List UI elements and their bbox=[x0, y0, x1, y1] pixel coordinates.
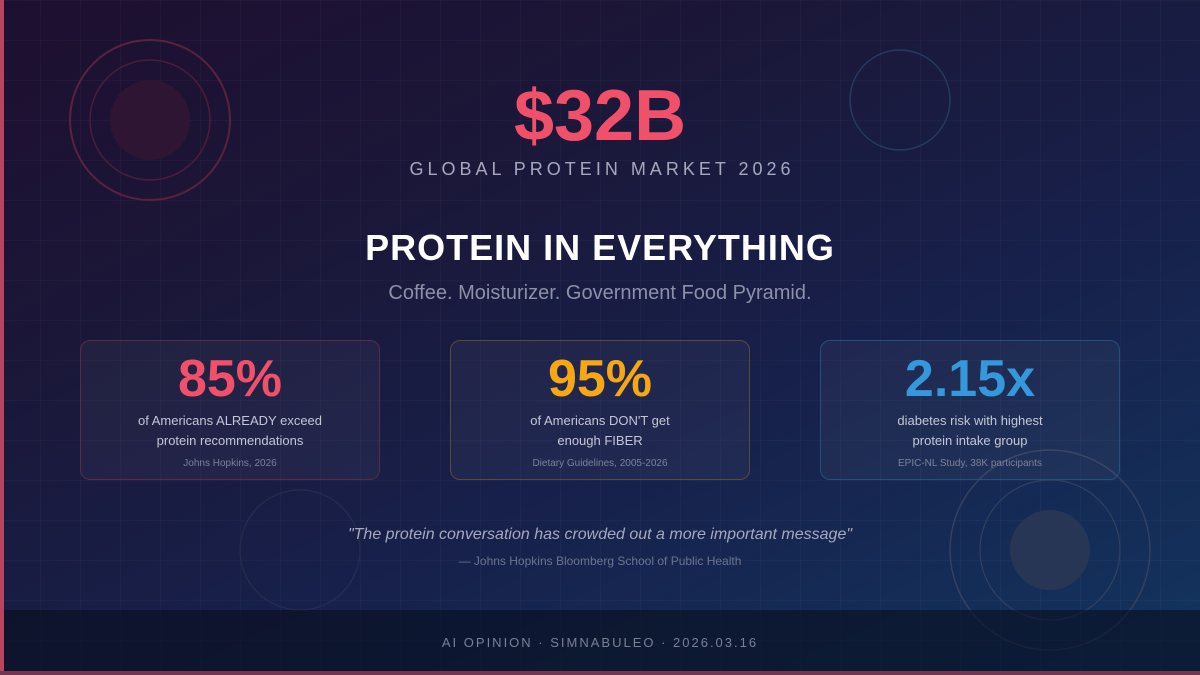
card: 95% bbox=[450, 340, 750, 480]
card: 85%: protein recommendations bbox=[157, 433, 303, 448]
card: 85%: 85% bbox=[178, 350, 282, 408]
card: 95%: of Americans DON'T get bbox=[530, 413, 670, 428]
heading: PROTEIN IN EVERYTHING bbox=[365, 227, 835, 268]
footer: AI OPINION · SIMNABULEO · 2026.03.16 bbox=[442, 635, 758, 650]
card: 2.15x: diabetes risk with highest bbox=[897, 413, 1043, 428]
card: 95%: 95% bbox=[548, 350, 652, 408]
left accent bar bbox=[0, 0, 4, 675]
card: 85%: of Americans ALREADY exceed bbox=[138, 413, 322, 428]
bottom accent bar bbox=[0, 671, 1200, 675]
card: 2.15x: 2.15x bbox=[905, 350, 1035, 408]
card: 85%: Johns Hopkins, 2026 bbox=[183, 458, 277, 469]
subtitle: GLOBAL PROTEIN MARKET 2026 bbox=[409, 159, 795, 179]
card: 95%: Dietary Guidelines, 2005-2026 bbox=[532, 458, 668, 469]
card: 2.15x: EPIC-NL Study, 38K participants bbox=[898, 458, 1042, 469]
quote attribution: — Johns Hopkins Bloomberg School of Public Health bbox=[459, 554, 741, 568]
quote: "The protein conversation has crowded out a more important message" bbox=[348, 526, 852, 543]
card: 95%: enough FIBER bbox=[557, 433, 643, 448]
big number: $32B bbox=[514, 76, 686, 156]
card: 2.15x: protein intake group bbox=[913, 433, 1027, 448]
footer bbox=[0, 610, 1200, 672]
card: 85% bbox=[80, 340, 380, 480]
tagline: Coffee. Moisturizer. Government Food Pyramid. bbox=[388, 282, 812, 304]
card: 2.15x bbox=[820, 340, 1120, 480]
